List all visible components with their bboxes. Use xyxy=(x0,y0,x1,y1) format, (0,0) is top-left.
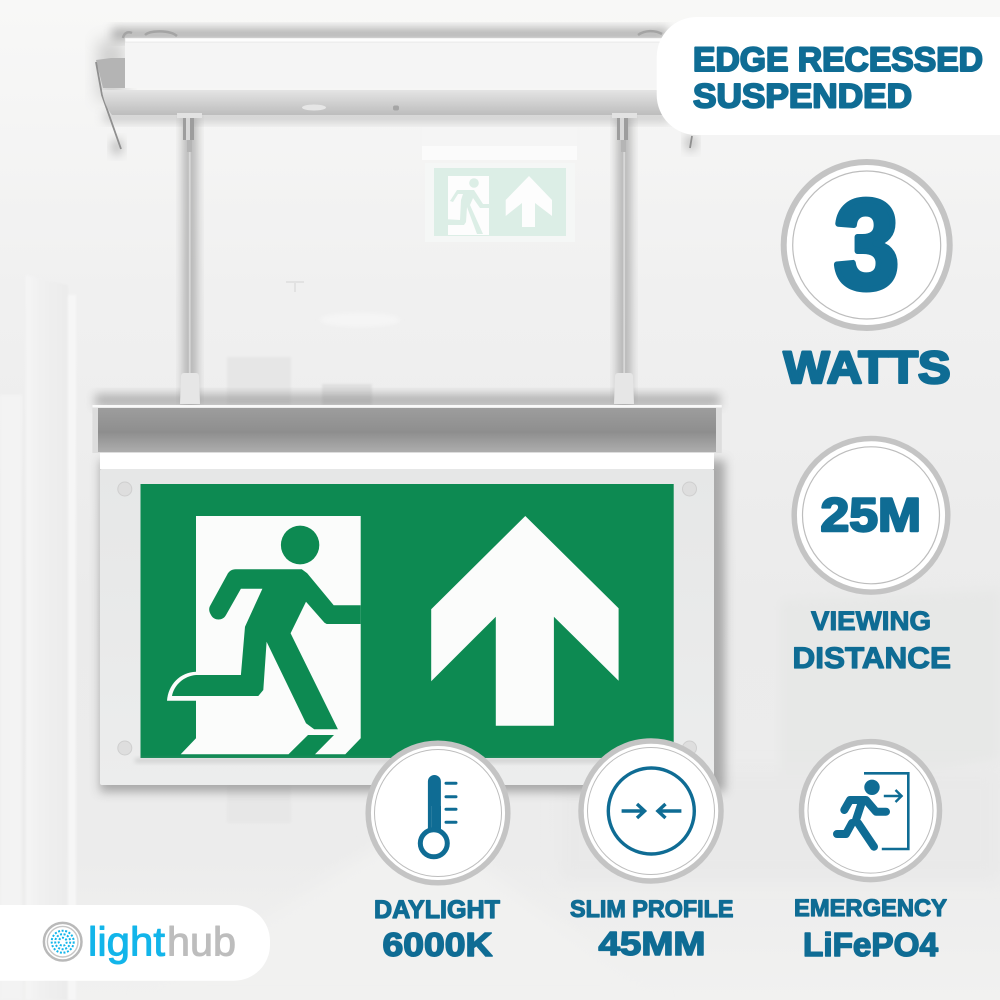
colour temperature feature xyxy=(368,743,508,963)
badge text line 2: SUSPENDED xyxy=(693,78,912,116)
slim profile label: SLIM PROFILE xyxy=(570,896,734,923)
body xyxy=(172,569,361,729)
wattage circle xyxy=(784,162,950,328)
wire shadows xyxy=(95,28,725,792)
product type badge xyxy=(657,17,1000,135)
logo wordmark: hub xyxy=(167,918,236,964)
icon: thermometer xyxy=(420,775,456,857)
emergency circle xyxy=(802,742,940,880)
icon: running person through door xyxy=(837,773,908,849)
sensor xyxy=(302,104,326,110)
logo wordmark: light xyxy=(88,918,166,964)
door xyxy=(181,516,361,754)
distance label line 2: DISTANCE xyxy=(792,642,951,675)
badge text line 1: EDGE RECESSED xyxy=(693,41,983,79)
wattage stat xyxy=(784,162,950,393)
reflected exit sign in background xyxy=(422,127,577,242)
temperature label: DAYLIGHT xyxy=(374,896,500,924)
runner xyxy=(167,526,361,729)
light band xyxy=(100,453,714,469)
distance label line 1: VIEWING xyxy=(811,606,931,636)
emergency value: LiFePO4 xyxy=(803,926,939,963)
logo pill xyxy=(0,905,270,981)
housing clips xyxy=(96,31,692,149)
logo emblem xyxy=(44,923,82,960)
wattage number: 3 xyxy=(834,174,899,315)
indicator xyxy=(393,106,399,110)
viewing distance stat xyxy=(792,438,951,675)
suspension wires and fittings xyxy=(177,113,637,404)
head xyxy=(281,526,319,564)
ceiling housing xyxy=(96,31,692,149)
temperature circle xyxy=(368,743,508,883)
shoe outline xyxy=(167,672,196,701)
housing lower face xyxy=(102,90,670,115)
acrylic panel xyxy=(100,469,714,785)
green sign xyxy=(140,484,674,758)
logo wordmark xyxy=(88,918,236,964)
distance number: 25M xyxy=(820,488,921,541)
wattage label: WATTS xyxy=(784,342,950,393)
slim profile circle xyxy=(581,741,721,881)
aluminium head bar xyxy=(92,405,722,453)
temperature value: 6000K xyxy=(382,926,493,963)
icon: converging arrows xyxy=(608,768,694,854)
slim profile value: 45MM xyxy=(598,925,706,962)
distance circle xyxy=(794,438,948,592)
exit sign luminaire xyxy=(92,405,722,785)
panel screws xyxy=(118,482,697,755)
slim profile feature xyxy=(570,741,734,962)
emergency battery feature xyxy=(794,742,947,963)
emergency label: EMERGENCY xyxy=(794,895,947,922)
housing top face xyxy=(125,38,670,88)
up arrow xyxy=(431,516,619,726)
